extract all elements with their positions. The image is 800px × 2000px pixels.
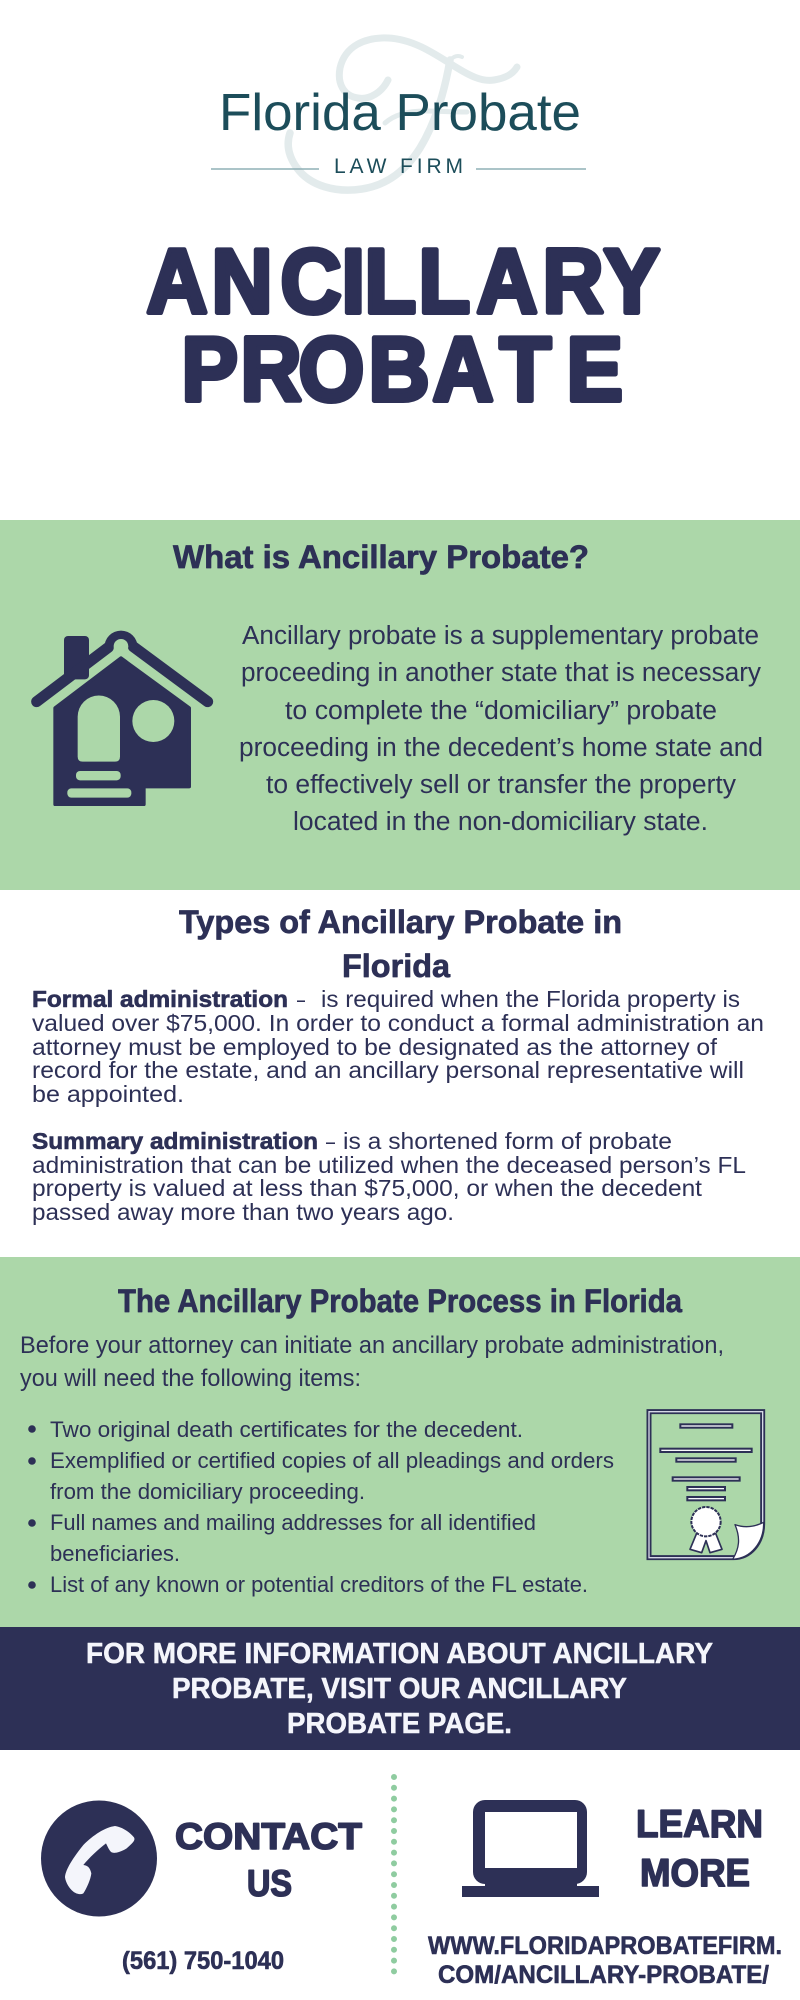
panel: call to action banner: FOR MORE INFORMATION ABOUT ANCILLARY (86, 1638, 713, 1670)
summary administration text: administration that can be utilized when the deceased person’s FL (32, 1152, 746, 1178)
panel: call to action banner (0, 1627, 800, 1750)
website url: COM/ANCILLARY-PROBATE/ (438, 1961, 769, 1989)
contact heading: CONTACT (175, 1816, 362, 1857)
icon: phone (41, 1800, 157, 1916)
panel: call to action banner: PROBATE PAGE. (287, 1708, 512, 1740)
summary administration text: is a shortened form of probate (343, 1128, 672, 1154)
formal administration text: valued over $75,000. In order to conduct a formal administration an (32, 1010, 764, 1036)
bullet list: from the domiciliary proceeding. (50, 1479, 365, 1504)
panel: learn more (428, 1800, 782, 1989)
bullet list: List of any known or potential creditors of the FL estate. (50, 1572, 588, 1597)
title: PROBATE (182, 318, 623, 420)
heading: What is Ancillary Probate? (173, 539, 589, 575)
icon: script F monogram (288, 38, 517, 190)
bullet list: Two original death certificates for the decedent. (50, 1417, 523, 1442)
icon: house (37, 631, 208, 804)
bullet list: Full names and mailing addresses for all identified (50, 1510, 536, 1535)
definition text: proceeding in the decedent’s home state and (239, 734, 763, 762)
heading: Florida (342, 948, 450, 984)
definition text: proceeding in another state that is necessary (241, 659, 761, 687)
phone number: (561) 750-1040 (122, 1947, 284, 1975)
definition text: to effectively sell or transfer the property (266, 771, 736, 799)
definition text (239, 622, 763, 836)
logo (211, 38, 586, 190)
title: ANCILLARY (146, 230, 660, 332)
formal administration text: attorney must be employed to be designated as the attorney of (32, 1034, 718, 1060)
formal administration text: – (297, 986, 305, 1012)
bullet list: beneficiaries. (50, 1541, 180, 1566)
summary administration text (32, 1128, 746, 1225)
panel: what is ancillary probate (0, 520, 800, 890)
logo rules (211, 168, 586, 170)
website url: WWW.FLORIDAPROBATEFIRM. (428, 1932, 782, 1960)
dotted divider (391, 1777, 397, 1972)
bullet list (28, 1417, 614, 1597)
contact heading (175, 1816, 362, 1904)
bullet list: Exemplified or certified copies of all pleadings and orders (50, 1448, 614, 1473)
heading: The Ancillary Probate Process in Florida (118, 1283, 682, 1319)
formal administration text: is required when the Florida property is (321, 986, 740, 1012)
summary administration text: – (326, 1128, 335, 1154)
title (146, 230, 660, 420)
icon: laptop (462, 1800, 599, 1897)
contact heading: US (247, 1863, 292, 1904)
formal administration text: record for the estate, and an ancillary personal representative will (32, 1057, 744, 1083)
summary administration text: Summary administration (32, 1128, 318, 1154)
definition text: Ancillary probate is a supplementary probate (242, 622, 759, 650)
website url (428, 1932, 782, 1989)
formal administration text: Formal administration (32, 986, 288, 1012)
heading (179, 904, 622, 984)
intro text: Before your attorney can initiate an ancillary probate administration, (20, 1332, 724, 1359)
learn more heading (636, 1803, 763, 1895)
intro text: you will need the following items: (20, 1365, 361, 1392)
icon: certificate (649, 1412, 764, 1559)
panel: call to action banner: PROBATE, VISIT OUR ANCILLARY (172, 1673, 627, 1705)
learn more heading: MORE (640, 1852, 750, 1895)
panel: contact (41, 1800, 362, 1975)
panel: process (0, 1257, 800, 1627)
logo subtitle: LAW FIRM (334, 155, 463, 178)
heading: Types of Ancillary Probate in (179, 904, 622, 940)
learn more heading: LEARN (636, 1803, 763, 1846)
formal administration text: be appointed. (32, 1081, 184, 1107)
logo name: Florida Probate (219, 84, 581, 142)
summary administration text: passed away more than two years ago. (32, 1199, 454, 1225)
definition text: located in the non-domiciliary state. (293, 808, 708, 836)
definition text: to complete the “domiciliary” probate (285, 697, 717, 725)
intro text (20, 1332, 724, 1392)
summary administration text: property is valued at less than $75,000, or when the decedent (32, 1175, 703, 1201)
formal administration text (32, 986, 764, 1107)
panel: types of ancillary probate (32, 904, 764, 1225)
